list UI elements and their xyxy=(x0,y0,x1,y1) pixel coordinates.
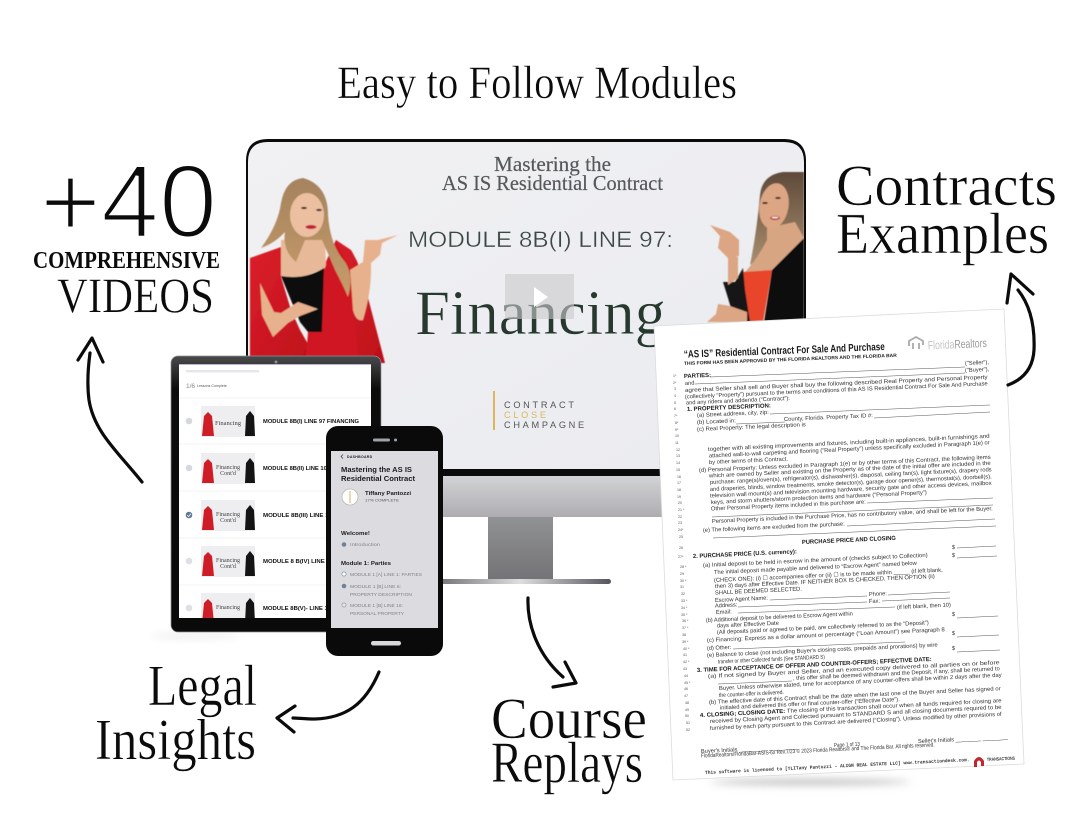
section 2: purchase price: SHALL BE DEEMED SELECTED. xyxy=(715,587,802,596)
section 2: purchase price: $ xyxy=(952,631,956,637)
section 4: closing: 4. CLOSING; CLOSING DATE: The closing of this transaction shall occur when all funds required for closing are xyxy=(700,698,1002,719)
avatar xyxy=(342,489,358,505)
monitor stand xyxy=(488,517,553,579)
section 1: property description: (d) Personal Property: Unless excluded in Paragraph 1(e) or by other terms of this Contract, the following items xyxy=(699,455,991,474)
welcome section: Introduction xyxy=(350,542,381,547)
section 3: time for acceptance: Buyer. Unless otherwise stated, time for acceptance of any counter-offers shall be within 2 days after the day xyxy=(719,673,1002,692)
line numbers: 31 xyxy=(680,585,684,589)
section 1: property description: (b) Located in: xyxy=(697,418,736,426)
module 1 section: Module 1: Parties xyxy=(341,561,391,567)
line numbers: 20 xyxy=(678,501,682,505)
module 1 section: PROPERTY DESCRIPTION xyxy=(350,592,412,597)
arrow: to legal insights xyxy=(277,672,379,732)
line numbers: 45 * xyxy=(684,681,691,685)
section: parties: PARTIES: xyxy=(684,373,711,380)
section 1: property description: Other Personal Property items included in this purchase are: xyxy=(711,499,866,512)
section 3: time for acceptance: initialed and delivered this offer or final counter-offer (“Effective Date”). xyxy=(720,697,900,711)
line numbers: 23 xyxy=(678,521,682,525)
line numbers xyxy=(673,374,691,732)
contracts word: Contracts xyxy=(836,153,1057,218)
paper sheet xyxy=(654,309,1024,780)
lesson row 2: MODULE 8B(II) LINE 104 xyxy=(263,466,330,472)
section 1: property description: (a) Street address, city, zip: xyxy=(697,410,769,419)
section 3: time for acceptance: (a) If not signed by Buyer and Seller, and an executed copy delivered to all parties on or before xyxy=(708,660,1000,680)
lesson row 3: MODULE 8B(III) LINE 116 xyxy=(263,513,335,519)
section 2: purchase price: Fax: xyxy=(869,598,881,605)
line numbers: 16 xyxy=(677,475,681,479)
lesson row 1: Financing xyxy=(215,420,242,427)
section 2: purchase price: (if left blank, then 10) xyxy=(897,603,951,611)
phone xyxy=(326,426,443,656)
tablet xyxy=(171,356,381,632)
section 2: purchase price: (CHECK ONE): (i) ☐ accompanies offer or (ii) ☐ is to be made within _____ (if left blank, xyxy=(714,567,943,584)
section 1: property description xyxy=(687,403,996,546)
section 3: time for acceptance: , this offer shall be deemed withdrawn and the Deposit, if any, shall be returned to xyxy=(793,666,1000,682)
course title: Mastering the xyxy=(494,152,611,176)
line numbers: 12 xyxy=(676,448,680,452)
lesson row 5: MODULE 8B(V)- LINE 116 xyxy=(263,606,334,612)
florida realtors logo: FloridaRealtors xyxy=(928,336,987,352)
line numbers: 19 xyxy=(677,495,681,499)
page footer: Buyer's Initials _________ _________ xyxy=(701,744,798,755)
section: parties: (collectively “Property”) pursuant to the terms and conditions of this AS IS Residential Contract For Sale And Purchase xyxy=(685,381,988,400)
line numbers: 14 xyxy=(676,461,680,465)
brand logo xyxy=(494,391,587,430)
line numbers: 44 xyxy=(684,674,688,678)
section 1: property description: which are owned by Seller and existing on the Property as of the date of the initial offer are included in the xyxy=(708,461,991,480)
section 3: time for acceptance: 3. TIME FOR ACCEPTANCE OF OFFER AND COUNTER-OFFERS; EFFECTIVE DATE: xyxy=(697,657,932,674)
course name xyxy=(341,467,416,483)
section 1: property description: 1. PROPERTY DESCRIPTION: xyxy=(687,403,771,413)
section: parties xyxy=(684,360,990,406)
section 1: property description: and draperies, blinds, window treatments, smoke detector(s), garage door opener(s), thermostat(s), doorbell(s), xyxy=(710,474,992,493)
monitor base xyxy=(429,579,611,584)
monitor xyxy=(246,139,806,584)
section 1: property description: together with all existing improvements and fixtures, including built-in appliances, built-in furnishings and xyxy=(708,434,990,453)
heading: legal insights xyxy=(95,653,257,772)
section 2: purchase price: The initial deposit made payable and delivered to “Escrow Agent” named below xyxy=(714,561,918,576)
lessons progress xyxy=(186,384,226,388)
lesson row 5: Financing xyxy=(216,605,240,611)
line numbers: 29 xyxy=(680,572,684,576)
section 2: purchase price: Address: xyxy=(715,602,738,609)
course name: Mastering the AS IS xyxy=(341,467,412,474)
line numbers: 5 xyxy=(674,401,676,405)
tablet screen xyxy=(179,364,371,624)
section 2: purchase price: 2. PURCHASE PRICE (U.S. currency): xyxy=(693,549,797,560)
section 1: property description: County, Florida. Property Tax ID #: xyxy=(784,413,873,423)
shadow under tablet xyxy=(150,634,240,638)
subheading: videos: VIDEOS xyxy=(57,267,214,323)
section 2: purchase price: $ xyxy=(952,545,956,551)
line numbers: 9* xyxy=(675,428,679,432)
line numbers: 15 xyxy=(676,468,680,472)
course name: Residential Contract xyxy=(341,476,416,483)
lesson row 3 xyxy=(186,500,335,531)
lesson row 2: Financing xyxy=(216,465,240,471)
section 2: purchase price: (a) Initial deposit to be held in escrow in the amount of (checks subject to Collection) xyxy=(703,553,928,569)
section 1: property description: attached wall-to-wall carpeting and flooring (“Real Property”) unless specifically excluded in Paragraph 1(e) or xyxy=(709,440,990,459)
line numbers: 10 xyxy=(675,434,679,438)
insights word: Insights xyxy=(95,707,256,772)
welcome section xyxy=(341,531,381,547)
section 1: property description: PURCHASE PRICE AND CLOSING xyxy=(802,536,896,546)
transactions logo: TRANSACTIONS xyxy=(987,756,1015,762)
line numbers: 39 * xyxy=(682,640,689,644)
section 2: purchase price: Email: xyxy=(716,609,732,616)
heading: +40 comprehensive videos xyxy=(33,144,220,323)
line numbers: 17 xyxy=(677,481,681,485)
line numbers: 36 * xyxy=(682,619,689,623)
line numbers: 43 xyxy=(683,667,687,671)
module 1 section xyxy=(341,561,422,616)
section 2: purchase price: then 3) days after Effective Date. IF NEITHER BOX IS CHECKED, THEN OPTION (ii) xyxy=(715,574,935,590)
lesson row 3: Cont'd xyxy=(220,518,236,524)
line numbers: 50 xyxy=(685,714,689,718)
monitor bezel xyxy=(246,139,806,476)
section: parties: and any riders and addenda (“Contract”): xyxy=(686,396,790,406)
heading: course replays xyxy=(491,686,647,795)
phone home button xyxy=(371,641,401,646)
lesson name: Financing xyxy=(415,278,666,348)
section 2: purchase price: Phone: xyxy=(869,591,888,598)
subheading: comprehensive: COMPREHENSIVE xyxy=(33,247,220,274)
phone body xyxy=(326,426,443,656)
contract document xyxy=(654,309,1024,780)
section 2: purchase price: days after Effective Date xyxy=(717,621,779,629)
line numbers: 25 xyxy=(679,535,683,539)
phone speaker xyxy=(373,438,397,442)
section 2: purchase price: (c) Financing: Express as a dollar amount or percentage (“Loan Amount”) see Paragraph 8 xyxy=(707,627,945,644)
module 1 section: MODULE 1 [A] LINE 1: PARTIES xyxy=(350,572,422,577)
presenter left xyxy=(250,178,398,363)
brand logo: CHAMPAGNE xyxy=(504,420,587,430)
line numbers: 41 xyxy=(683,653,687,657)
tablet body xyxy=(171,356,381,632)
lesson row 4: Financing xyxy=(216,558,240,564)
line numbers: 48 xyxy=(685,701,689,705)
page footer: This software is licensed to [TLITany Pantozzi - ALIGN REAL ESTATE LLC] www.transactiondesk.com. xyxy=(705,757,970,776)
course word: Course xyxy=(491,686,647,751)
section 2: purchase price: $ xyxy=(952,646,956,652)
section 2: purchase price: $ xyxy=(952,612,956,618)
line numbers: 46 xyxy=(684,687,688,691)
line numbers: 33 * xyxy=(681,599,688,603)
replays word: Replays xyxy=(491,730,643,795)
line numbers: 49 xyxy=(685,708,689,712)
big number: +40 xyxy=(40,144,217,260)
monitor screen xyxy=(248,142,804,469)
lessons progress: Lessons Complete xyxy=(197,384,227,388)
section 1: property description: Personal Property is included in the Purchase Price, has no contributory value, and shall be left for the Buyer. xyxy=(712,506,993,525)
arrow: to course replays xyxy=(528,598,576,687)
lesson row 5 xyxy=(186,593,326,618)
contract heading xyxy=(684,341,897,367)
section 3: time for acceptance: (b) The effective date of this Contract shall be the date when the last one of the Buyer and Seller has signed or xyxy=(709,686,1001,706)
play button xyxy=(505,274,574,319)
line numbers: 28 * xyxy=(680,565,687,569)
page footer: FloridaRealtors/FloridaBar-ASIS-6x Rev.7/23 © 2023 Florida Realtors® and The Florida Bar. All rights reserved. xyxy=(701,741,935,759)
module 1 section: PERSONAL PROPERTY xyxy=(350,611,404,616)
phone screen xyxy=(331,451,438,628)
lesson row 4: Cont'd xyxy=(220,564,236,570)
student name xyxy=(365,491,412,502)
welcome section: Welcome! xyxy=(341,531,370,537)
line numbers: 13 xyxy=(676,454,680,458)
heading: contracts examples xyxy=(836,153,1057,266)
line numbers: 8* xyxy=(675,421,679,425)
back link: DASHBOARD xyxy=(347,455,373,459)
lesson row 1 xyxy=(186,406,359,437)
line numbers: 4 xyxy=(674,394,676,398)
presenter right xyxy=(707,172,804,322)
examples word: Examples xyxy=(836,201,1049,266)
section 1: property description: (c) Real Property: The legal description is xyxy=(697,422,806,433)
section: parties: agree that Seller shall sell and Buyer shall buy the following described Real Property and Personal Property xyxy=(685,375,988,394)
lesson row 3: Financing xyxy=(216,512,240,518)
section 3: time for acceptance: the counter-offer is delivered. xyxy=(719,690,784,699)
line numbers: 3 xyxy=(674,387,676,391)
section 3: time for acceptance xyxy=(697,657,1002,711)
line numbers: 6 xyxy=(674,407,676,411)
section 2: purchase price: (e) Balance to close (not including Buyer's closing costs, prepaids and prorations) by wire xyxy=(707,643,938,659)
lesson row 1: MODULE 8B(I) LINE 97 FINANCING xyxy=(263,419,359,425)
page footer: Page 1 of 13 xyxy=(834,742,860,749)
lesson row 4 xyxy=(186,546,336,577)
lessons progress: 1/6 xyxy=(186,383,195,390)
contract heading: “AS IS” Residential Contract For Sale And Purchase xyxy=(684,341,885,361)
line numbers: 37 * xyxy=(682,626,689,630)
section 2: purchase price: transfer or other Collected funds (See STANDARD S) xyxy=(718,655,825,665)
section 4: closing: received by Closing Agent and Collected pursuant to STANDARD S and all closing documents required to be xyxy=(710,705,1002,725)
section 1: property description: (e) The following items are excluded from the purchase: xyxy=(703,522,845,534)
line numbers: 52 xyxy=(686,728,690,732)
lesson row 4: MODULE 8 B(IV) LINE 116 xyxy=(263,559,336,565)
section 1: property description: keys, and storm shutters/storm protection items and hardware (“Personal Property”) xyxy=(711,490,927,506)
student name: 17% COMPLETE xyxy=(365,498,400,502)
line numbers: 34 * xyxy=(681,606,688,610)
transactions logo xyxy=(974,756,1015,767)
line numbers: 42 * xyxy=(683,660,690,664)
brand logo: CLOSE xyxy=(504,410,549,420)
lesson row 2: Cont'd xyxy=(220,471,236,477)
line numbers: 27* xyxy=(678,555,684,559)
module 1 section: MODULE 1 [B] LINE 6: xyxy=(350,584,401,589)
tablet camera xyxy=(274,360,278,364)
line numbers: 47 xyxy=(684,694,688,698)
title: Easy to Follow Modules xyxy=(337,57,737,109)
line numbers: 26 xyxy=(679,546,683,550)
student name: Tiffany Pantozzi xyxy=(365,491,412,497)
monitor chin xyxy=(246,476,662,517)
section 2: purchase price: Escrow Agent Name: xyxy=(715,596,768,604)
section 2: purchase price xyxy=(693,545,1000,665)
florida realtors logo xyxy=(909,336,987,352)
section: parties: ("Seller"), xyxy=(965,360,989,367)
section: parties: and xyxy=(685,381,695,387)
line numbers: 1* xyxy=(673,374,677,378)
section 4: closing xyxy=(700,698,1002,732)
course title: AS IS Residential Contract xyxy=(442,171,663,195)
line numbers: 7* xyxy=(674,414,678,418)
line numbers: 30 * xyxy=(680,579,687,583)
section 1: property description: purchase: range(s)/oven(s), refrigerator(s), dishwasher(s), disposal, ceiling fan(s), light fixture(s), drapery rods xyxy=(710,467,992,486)
line numbers: 22 xyxy=(678,515,682,519)
section 2: purchase price: (d) Other: xyxy=(707,645,732,652)
line numbers: 38 xyxy=(682,633,686,637)
course title xyxy=(442,156,663,190)
section 2: purchase price: (b) Additional deposit to be delivered to Escrow Agent within xyxy=(706,611,853,624)
section 1: property description: television wall mount(s) and television mounting hardware, security gate and other access devices, mailbox xyxy=(710,481,992,499)
line numbers: 32 xyxy=(681,592,685,596)
line numbers: 35 * xyxy=(681,613,688,617)
section 1: property description: by other terms of this Contract. xyxy=(709,457,788,466)
arrow: to contracts examples xyxy=(1007,274,1034,385)
page footer xyxy=(701,735,1009,776)
line numbers: 40 * xyxy=(683,647,690,651)
lesson row 2 xyxy=(186,453,330,484)
line numbers: 24* xyxy=(678,528,684,532)
section: parties: ("Buyer"), xyxy=(965,367,990,374)
arrow: to videos xyxy=(78,338,142,482)
section 2: purchase price: (All deposits paid or agreed to be paid, are collectively referred to as the “Deposit”) xyxy=(717,620,929,636)
module 1 section: MODULE 1 [B] LINE 16: xyxy=(350,603,403,608)
section 4: closing: furnished by each party pursuant to this Contract are delivered (“Closing”). Unless modified by other provisions of xyxy=(710,712,1002,732)
section 2: purchase price: $ xyxy=(952,553,956,559)
legal word: Legal xyxy=(148,653,257,718)
line numbers: 11 xyxy=(675,441,679,445)
contract heading: THIS FORM HAS BEEN APPROVED BY THE FLORIDA REALTORS AND THE FLORIDA BAR xyxy=(684,353,897,367)
line numbers: 2* xyxy=(673,381,677,385)
line numbers: 18 xyxy=(677,488,681,492)
shadow under contract xyxy=(710,779,910,785)
module label: MODULE 8B(I) LINE 97: xyxy=(408,227,673,252)
brand logo: CONTRACT xyxy=(504,400,577,410)
line numbers: 51 xyxy=(686,721,690,725)
page footer: Seller's Initials ________ ________ xyxy=(918,735,1009,745)
line numbers: 21 * xyxy=(678,508,685,512)
